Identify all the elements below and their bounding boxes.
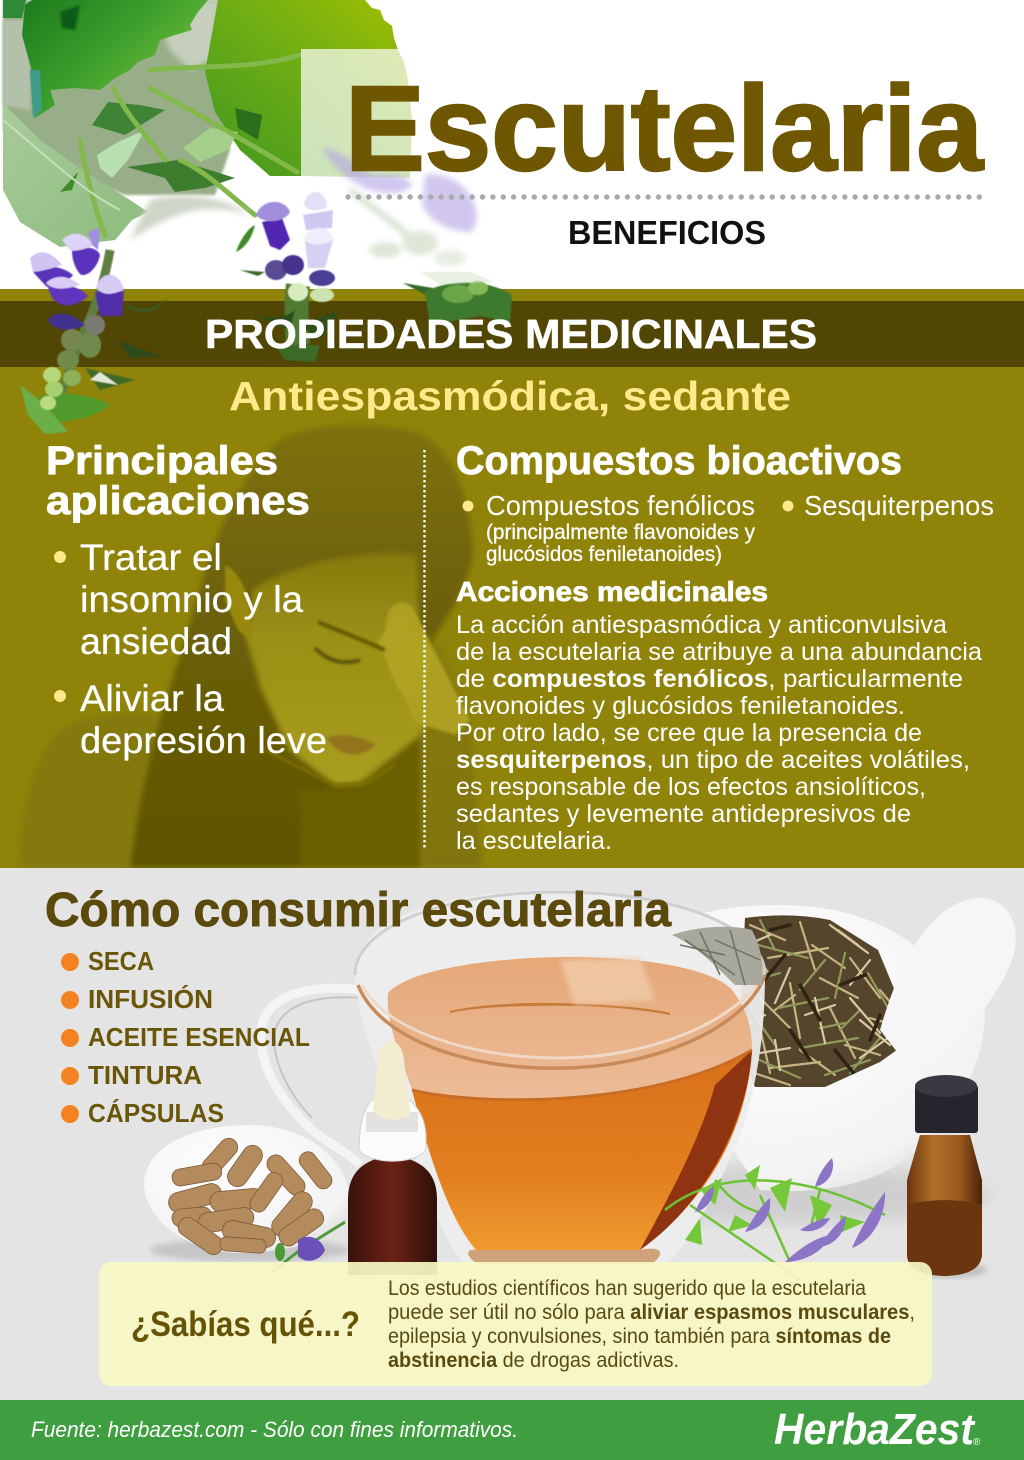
image: mortar with dried herb xyxy=(700,898,1016,1226)
subheading: properties: Antiespasmódica, sedante xyxy=(229,373,791,419)
pestle xyxy=(880,898,1016,1075)
title: Escutelaria xyxy=(345,60,985,196)
callout text: abstinencia de drogas adictivas. xyxy=(388,1348,679,1372)
item: dried: SECA xyxy=(88,946,154,976)
callout: did you know xyxy=(99,1262,932,1386)
image: glass cup of tea xyxy=(261,890,765,1265)
glass rim xyxy=(355,892,765,975)
tea surface xyxy=(388,957,752,1099)
subtitle: BENEFICIOS xyxy=(568,214,766,251)
text block: medicinal actions: es responsable de los efectos ansiolíticos, xyxy=(456,773,926,801)
image: faded flowers behind title xyxy=(322,148,477,266)
translucent title panel xyxy=(301,49,1024,271)
properties title band xyxy=(0,301,1024,367)
herb seen through glass xyxy=(672,927,763,985)
callout text xyxy=(388,1276,915,1372)
image: woman with headache xyxy=(20,425,482,868)
panel: main applications xyxy=(46,439,327,761)
heading: compounds: Compuestos bioactivos xyxy=(456,439,902,483)
list: forms of use xyxy=(61,946,310,1128)
image: flowering sprigs xyxy=(20,192,512,434)
callout text: puede ser útil no sólo para aliviar espasmos musculares, xyxy=(388,1300,915,1324)
panel: bioactive compounds xyxy=(456,439,994,855)
callout text: Los estudios científicos han sugerido que la escutelaria xyxy=(388,1276,866,1300)
bullet: insomnia: ansiedad xyxy=(80,621,232,662)
callout heading: ¿Sabías qué...? xyxy=(131,1305,360,1344)
item: infusion: INFUSIÓN xyxy=(88,984,213,1014)
bullet: phenolic compounds: (principalmente flavonoides y xyxy=(486,521,755,544)
section: how to consume background xyxy=(0,868,1024,1400)
bullet: depression: depresión leve xyxy=(80,720,327,761)
cup handle xyxy=(261,988,362,1165)
image: dropper bottle xyxy=(348,1041,437,1275)
logo: HerbaZest: ® xyxy=(973,1437,981,1448)
image: capsules bowl xyxy=(144,1125,350,1262)
image: small sprig near capsules xyxy=(272,1222,345,1272)
heading: medicinal properties: PROPIEDADES MEDICINALES xyxy=(205,311,817,357)
column divider xyxy=(423,450,426,850)
image: leaves at top left xyxy=(3,0,412,247)
item: essential oil: ACEITE ESENCIAL xyxy=(88,1022,310,1052)
capsules xyxy=(166,1135,335,1258)
heading: applications xyxy=(46,439,310,523)
bullet: depression: Aliviar la xyxy=(80,678,224,719)
heading: applications: aplicaciones xyxy=(46,479,310,523)
text block: medicinal actions: La acción antiespasmódica y anticonvulsiva xyxy=(456,611,947,639)
image: sprig with purple flowers xyxy=(665,1158,885,1280)
bullet: insomnia: insomnio y la xyxy=(80,579,303,620)
image: amber bottle xyxy=(903,1075,987,1278)
item: dried xyxy=(61,946,154,976)
herbs xyxy=(741,915,896,1087)
text block: medicinal actions xyxy=(456,611,982,855)
text block: medicinal actions: sedantes y levemente antidepresivos de xyxy=(456,800,911,828)
bullet: depression xyxy=(54,678,327,761)
heading: medicinal actions: Acciones medicinales xyxy=(456,576,768,607)
text block: medicinal actions: sesquiterpenos, un tipo de aceites volátiles, xyxy=(456,746,970,774)
sprig: left xyxy=(20,228,168,434)
bullet: phenolic compounds: Compuestos fenólicos xyxy=(486,490,755,521)
bullet: insomnia xyxy=(54,537,303,662)
glass body xyxy=(355,890,765,1265)
bullet: insomnia: Tratar el xyxy=(80,537,222,578)
section: properties background xyxy=(0,289,1024,868)
text block: medicinal actions: de compuestos fenólicos , particularmente xyxy=(456,665,963,693)
bullet: sesquiterpenes: Sesquiterpenos xyxy=(804,490,994,521)
bullet: phenolic compounds: glucósidos feniletanoides) xyxy=(486,543,722,566)
text block: medicinal actions: de la escutelaria se atribuye a una abundancia xyxy=(456,638,982,666)
heading: applications: Principales xyxy=(46,439,278,483)
sprig: center xyxy=(236,192,340,362)
cup base xyxy=(468,1249,660,1265)
heading: how to consume: Cómo consumir escutelaria xyxy=(45,884,671,937)
logo: HerbaZest: HerbaZest xyxy=(774,1405,976,1454)
text block: medicinal actions: flavonoides y glucósidos feniletanoides. xyxy=(456,692,905,720)
text block: medicinal actions: Por otro lado, se cree que la presencia de xyxy=(456,719,922,747)
footer bar xyxy=(0,1400,1024,1460)
dotted divider xyxy=(348,194,983,200)
sprig: right xyxy=(403,272,512,325)
item: capsules: CÁPSULAS xyxy=(88,1098,224,1128)
text block: medicinal actions: la escutelaria. xyxy=(456,827,612,855)
item: tincture: TINTURA xyxy=(88,1060,202,1090)
callout text: epilepsia y convulsiones, sino también para síntomas de xyxy=(388,1324,891,1348)
source note: Fuente: herbazest.com - Sólo con fines informativos. xyxy=(31,1417,518,1442)
bullet: phenolic compounds xyxy=(462,490,755,566)
tea body xyxy=(412,1050,752,1250)
